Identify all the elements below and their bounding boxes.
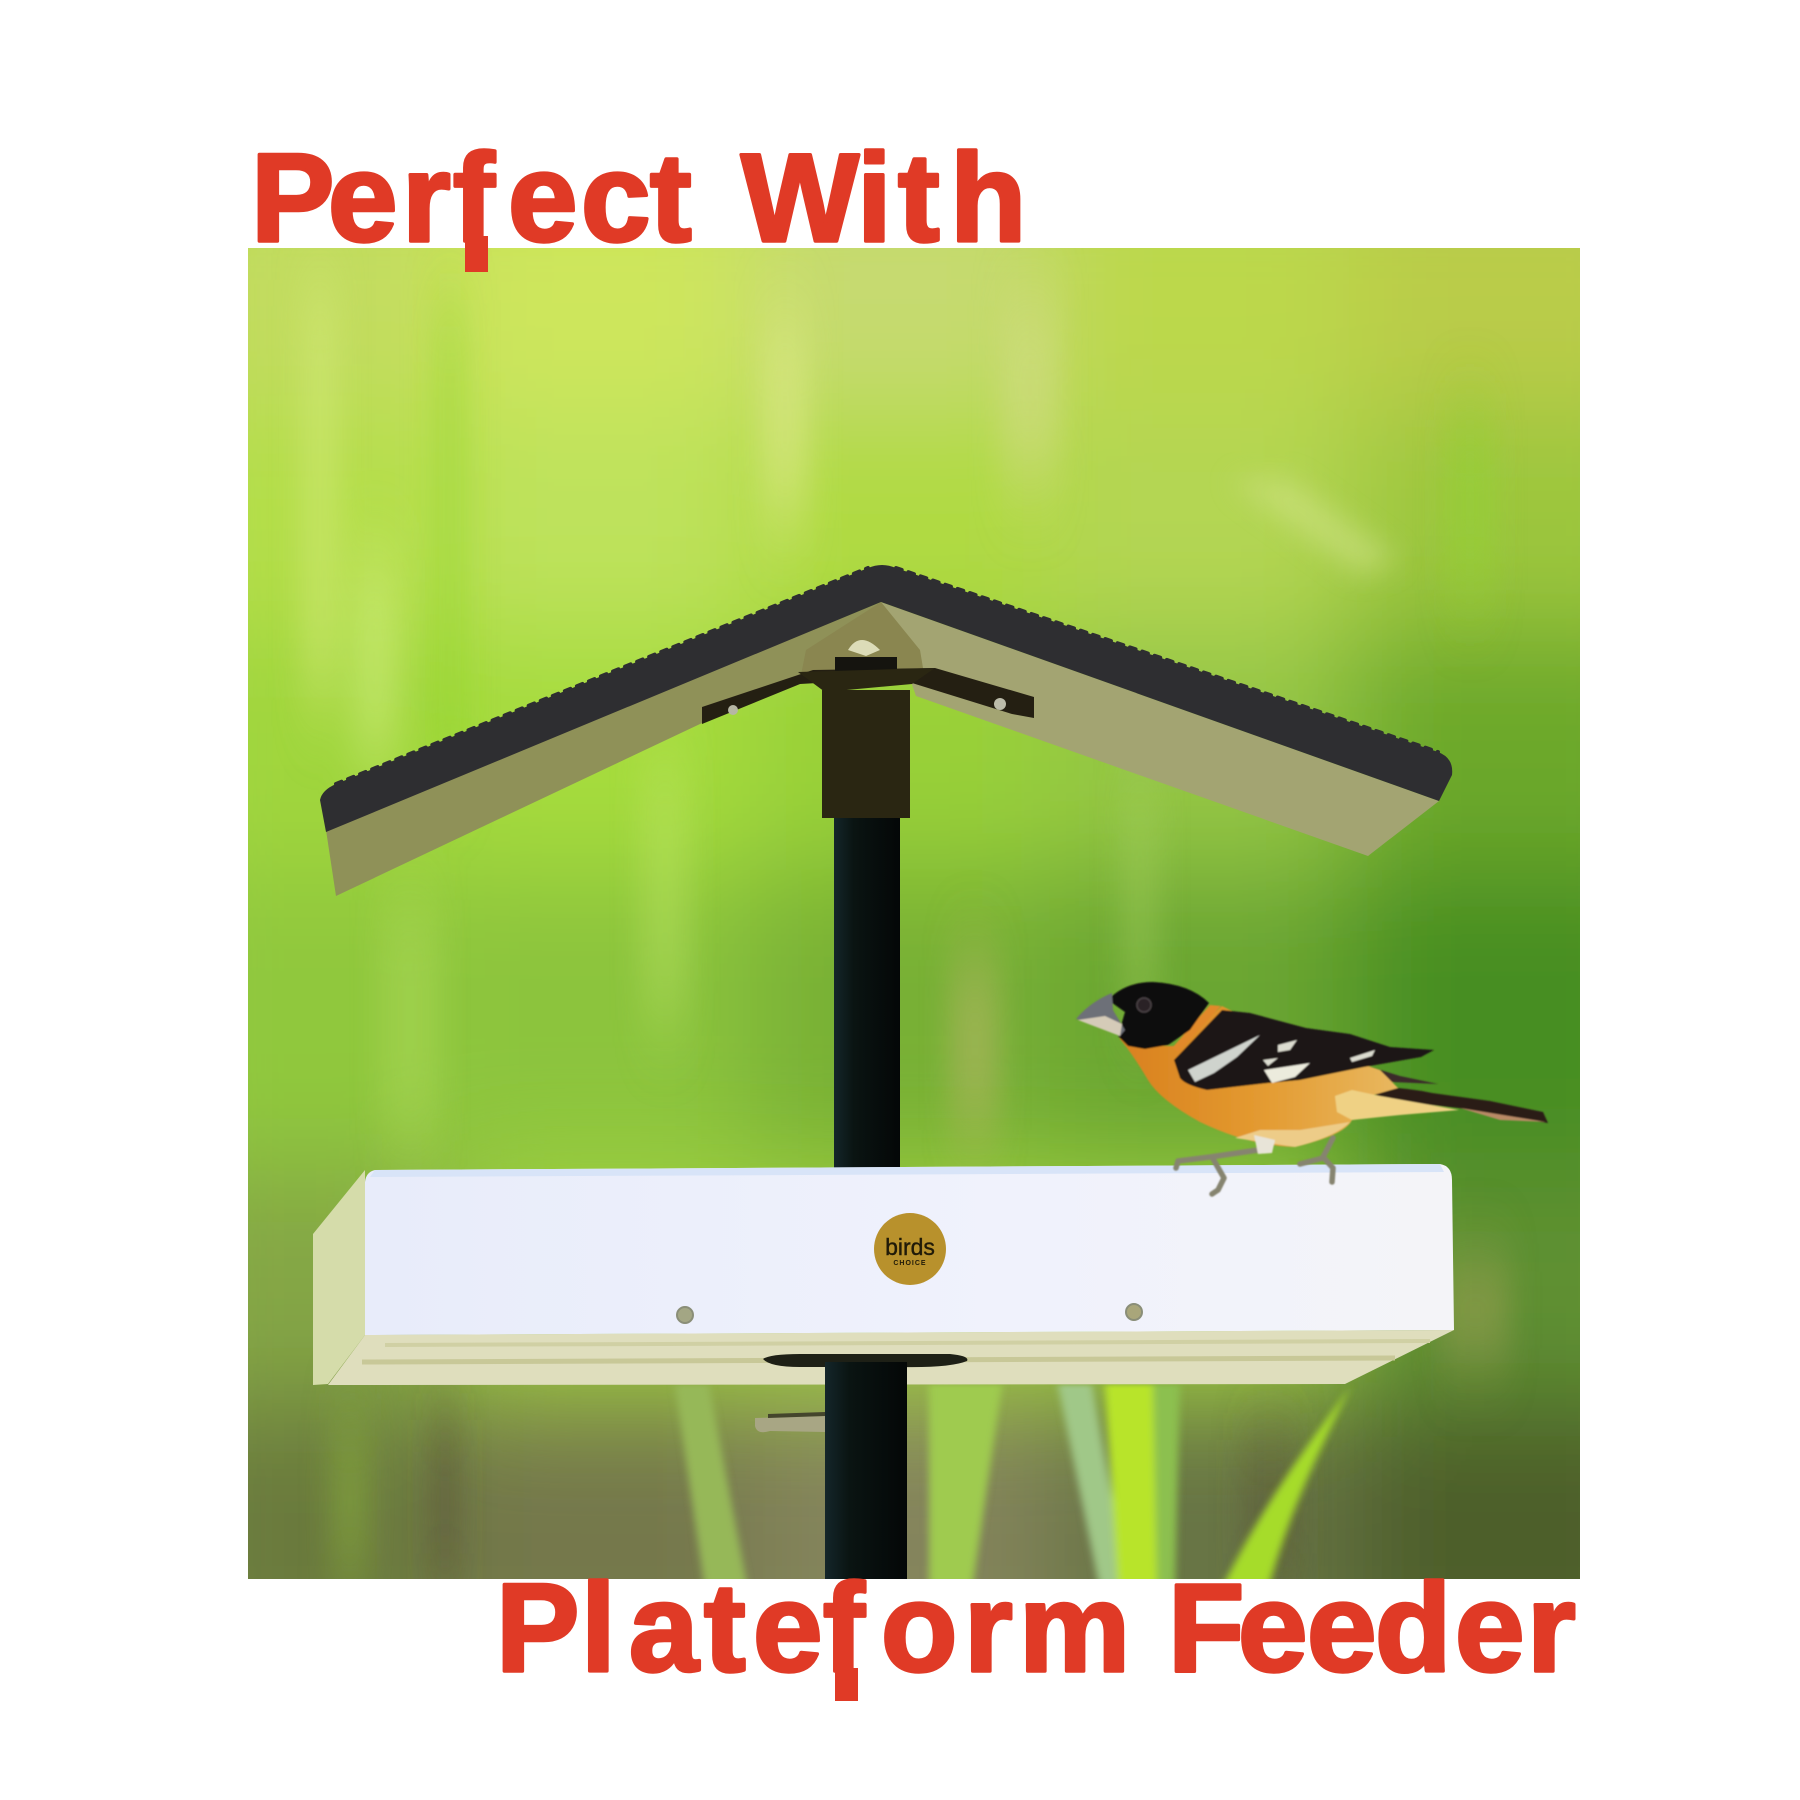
dark wing bbox=[1174, 1010, 1434, 1090]
f descender bbox=[465, 236, 488, 272]
infographic canvas bbox=[248, 148, 1580, 1701]
lower pole flange bbox=[763, 1354, 967, 1367]
platform left side bbox=[313, 1170, 365, 1385]
screw left bbox=[677, 1307, 693, 1323]
beak bbox=[1076, 993, 1125, 1036]
pale belly bbox=[1235, 1122, 1350, 1147]
lower tail feathers bbox=[1367, 1088, 1548, 1123]
platform front face bbox=[365, 1164, 1454, 1335]
side pin bbox=[755, 1416, 825, 1432]
f descender bbox=[835, 1668, 858, 1701]
screw right bbox=[1126, 1304, 1142, 1320]
photo panel: blurred green grass background bbox=[248, 248, 1580, 1579]
orange collar bbox=[1172, 1005, 1221, 1052]
white wing patch bbox=[1188, 1035, 1260, 1082]
roof underside, left bbox=[326, 602, 881, 896]
roof underside, right bbox=[881, 602, 1439, 856]
white wing bar bbox=[1264, 1063, 1310, 1083]
upper pole bbox=[834, 815, 900, 1171]
pale diagonal streak bbox=[1230, 480, 1400, 575]
black head bbox=[1108, 982, 1209, 1049]
bird: black-headed grosbeak bbox=[1076, 982, 1548, 1194]
roof top surface, dark shingle bbox=[320, 565, 1452, 832]
logo badge bbox=[874, 1213, 946, 1285]
apex shadowed underside bbox=[800, 602, 925, 680]
pole collar bbox=[822, 690, 910, 818]
roof scalloped edges bbox=[336, 568, 1438, 784]
legs and feet bbox=[1176, 1138, 1333, 1194]
platform underside bbox=[328, 1330, 1454, 1385]
title line 2: PlateformFeeder bbox=[496, 1559, 1576, 1698]
lower pole bbox=[825, 1362, 907, 1579]
eye bbox=[1137, 998, 1151, 1012]
title line 1: PerfectWith bbox=[251, 129, 1026, 268]
logo badge: birds bbox=[885, 1234, 935, 1260]
logo badge: CHOICE bbox=[893, 1260, 927, 1267]
orange body bbox=[1119, 1006, 1400, 1147]
grass blades below the platform bbox=[675, 1385, 1351, 1590]
bracket bbox=[702, 668, 1034, 724]
front face top highlight bbox=[370, 1164, 1444, 1177]
secondary tail bbox=[1360, 1066, 1438, 1084]
pale flank bbox=[1335, 1090, 1459, 1120]
bird feeder bbox=[313, 565, 1454, 1579]
bolt highlight under apex bbox=[848, 640, 880, 656]
